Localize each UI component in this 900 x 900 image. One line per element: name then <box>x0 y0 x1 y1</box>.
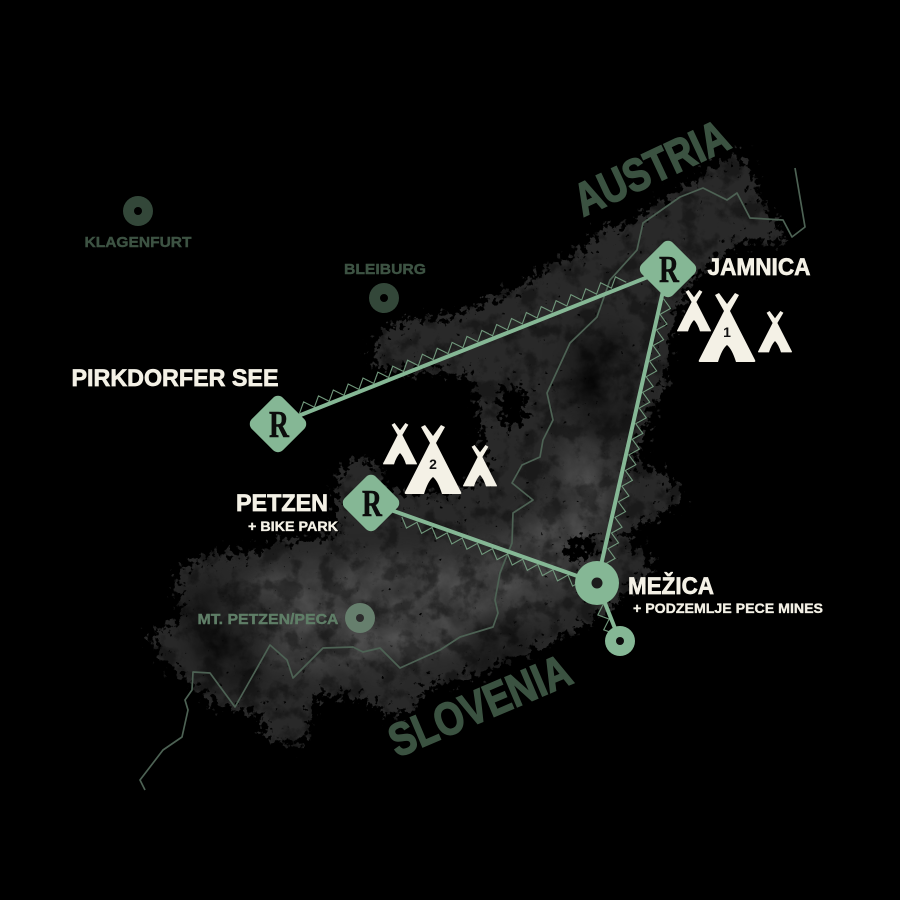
stop: Jamnica <box>637 238 810 300</box>
place marker: Bleiburg <box>344 262 426 313</box>
stop: Mežica <box>575 561 823 616</box>
place marker: Mt. Petzen/Peca: MT. PETZEN/PECA <box>198 612 339 628</box>
place marker: Klagenfurt: KLAGENFURT <box>84 235 192 251</box>
place marker: Mt. Petzen/Peca <box>198 603 375 633</box>
zigzag route edges <box>296 274 672 637</box>
small stop marker <box>605 626 635 656</box>
camp icons: Petzen, 2 <box>383 423 497 494</box>
route lines <box>278 269 668 641</box>
border lines <box>140 168 805 790</box>
stop: Petzen: PETZEN <box>236 490 328 517</box>
camp icons: Jamnica, 1 <box>677 290 792 362</box>
stop: Pirkdorfer See: PIRKDORFER SEE <box>72 365 278 392</box>
stop: Jamnica: R <box>659 249 679 291</box>
place marker: Bleiburg: BLEIBURG <box>344 262 426 278</box>
country label: Austria: AUSTRIA <box>565 109 737 226</box>
stop: Pirkdorfer See: R <box>269 404 289 446</box>
camp icons: Jamnica, 1: 1 <box>723 324 731 340</box>
stop: Petzen: + BIKE PARK <box>248 519 338 534</box>
stop: Mežica: + PODZEMLJE PECE MINES <box>633 601 823 616</box>
country label: Slovenia: SLOVENIA <box>381 644 579 767</box>
place marker: Klagenfurt <box>84 196 192 251</box>
terrain map <box>100 120 840 780</box>
stop: Pirkdorfer See <box>72 365 309 455</box>
stop: Mežica: MEŽICA <box>628 572 714 600</box>
stop: Petzen <box>236 472 402 534</box>
camp icons: Petzen, 2: 2 <box>429 456 437 472</box>
stop: Petzen: R <box>362 483 382 525</box>
stop: Jamnica: JAMNICA <box>708 254 810 281</box>
